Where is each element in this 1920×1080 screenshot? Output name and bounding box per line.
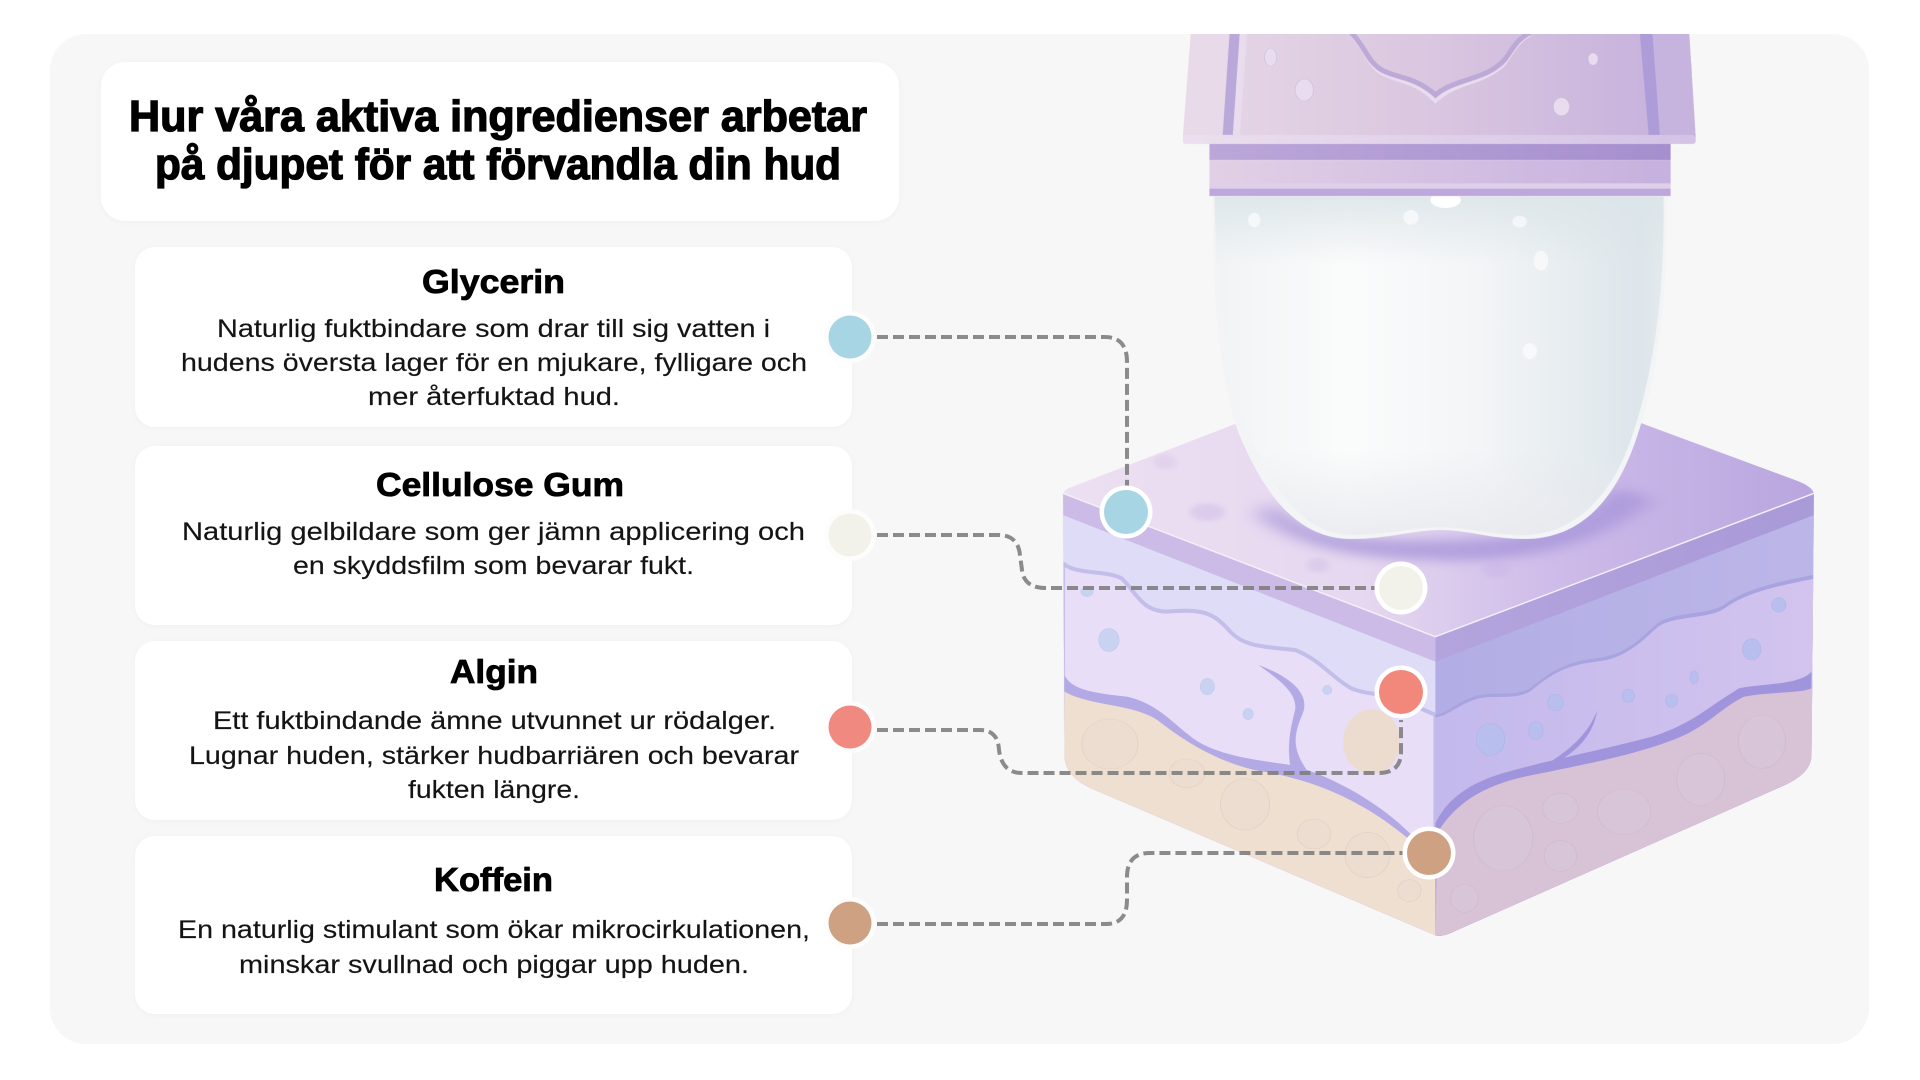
cube left face [1060,480,1438,947]
text: Koffein description [178,916,810,979]
cube right face [1435,480,1818,947]
text: Algin description: Lugnar huden, stärker hudbarriären och bevarar [189,742,799,770]
text: Algin description: fukten längre. [408,776,580,804]
tube cap [1183,30,1696,196]
fat cells left [1082,719,1421,902]
marker dot: Cellulose Gum card [824,509,876,561]
connector: Algin [877,720,1401,773]
text: Glycerin description [181,315,807,411]
text: Cellulose Gum description [182,518,805,580]
connector: Cellulose Gum [877,535,1376,588]
card: Koffein: Koffein [434,861,553,898]
marker dot: Glycerin on skin [1100,486,1152,538]
text: Glycerin description: hudens översta lager för en mjukare, fylligare och [181,349,807,377]
card: Koffein [135,836,852,1014]
marker dot: Glycerin card [824,311,876,363]
title card [101,62,899,221]
card: Algin: Algin [450,653,538,690]
illustration: tube [1183,30,1696,539]
card: Cellulose Gum [135,446,852,625]
card: Cellulose Gum: Cellulose Gum [376,466,624,503]
title: Hur våra aktiva ingredienser arbetar [129,92,867,141]
text: Glycerin description: mer återfuktad hud. [368,383,620,411]
marker dot: Koffein card [824,897,876,949]
title [129,92,867,189]
marker dot: Cellulose Gum on skin [1374,562,1428,614]
connector: Glycerin [877,337,1127,486]
vessel branch left [1258,665,1308,772]
marker dot: Algin card [824,701,876,753]
card: Glycerin [135,247,852,427]
text: Cellulose Gum description: Naturlig gelbildare som ger jämn applicering och [182,518,805,546]
title: på djupet för att förvandla din hud [155,140,841,189]
cube top face [1063,347,1814,637]
connector: Koffein [877,853,1404,924]
text: Algin description [189,707,799,804]
marker dot: Koffein on skin [1402,826,1456,880]
fat cells right [1451,715,1785,912]
card: Glycerin: Glycerin [422,263,565,300]
vessel branch right [1552,712,1597,760]
dermis bubbles right [1476,598,1786,755]
text: Algin description: Ett fuktbindande ämne utvunnet ur rödalger. [213,707,776,735]
tan cell [1343,709,1400,774]
text: Glycerin description: Naturlig fuktbindare som drar till sig vatten i [217,315,770,343]
text: Cellulose Gum description: en skyddsfilm som bevarar fukt. [293,552,694,580]
illustration: skin cube [1063,423,1814,936]
dermis bubbles left [1081,587,1332,720]
marker dot: Algin on skin [1374,666,1428,718]
card: Algin [135,641,852,820]
text: Koffein description: En naturlig stimulant som ökar mikrocirkulationen, [178,916,810,944]
tube body [1213,192,1667,539]
text: Koffein description: minskar svullnad och piggar upp huden. [239,951,749,979]
